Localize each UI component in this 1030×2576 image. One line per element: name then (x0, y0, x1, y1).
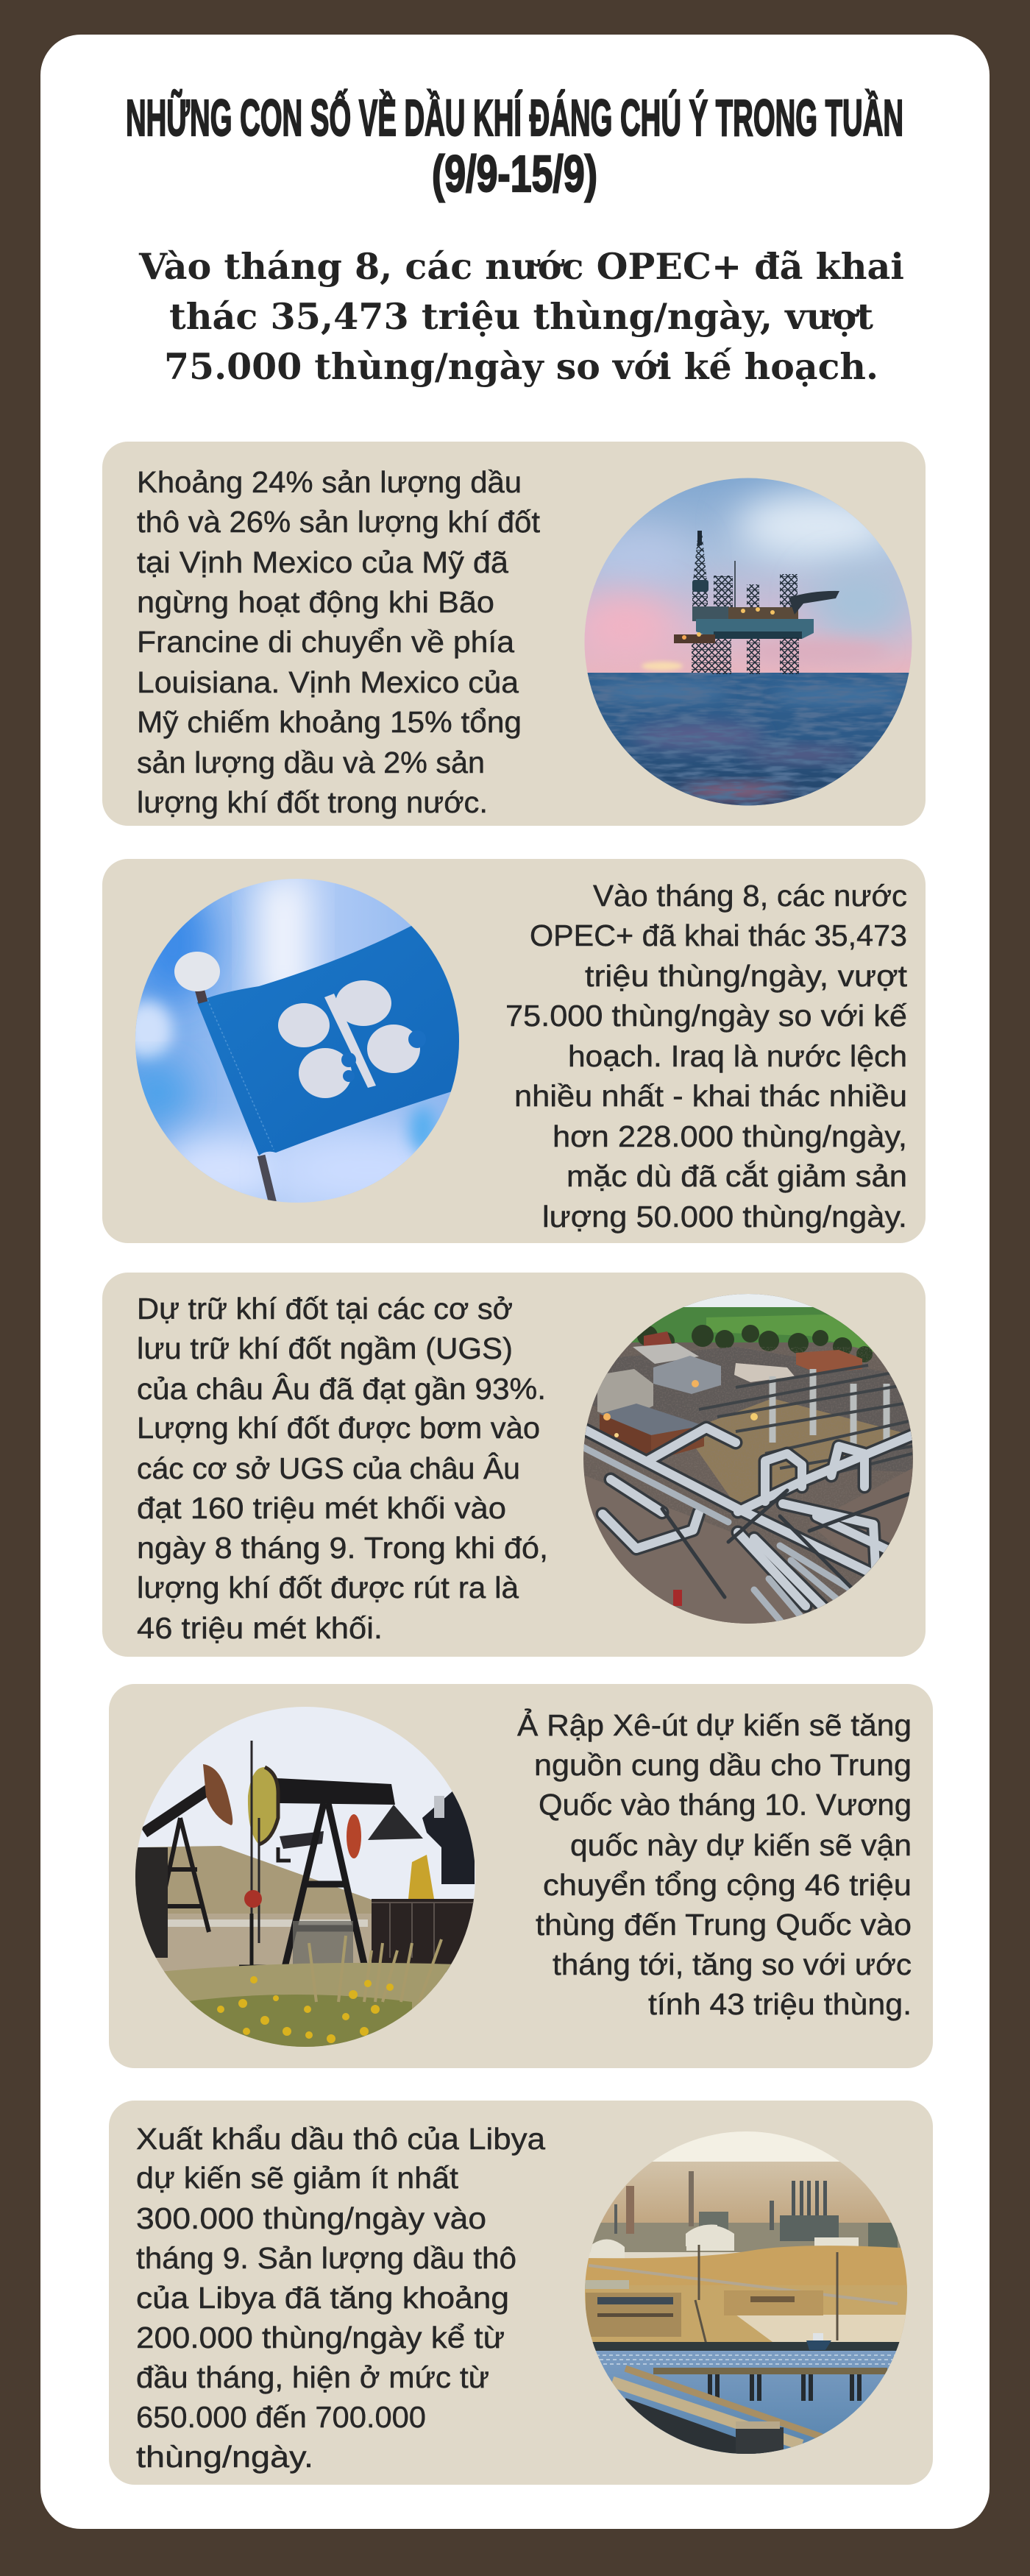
text block: OPEC+: nhiều nhất - khai thác nhiều (514, 1079, 907, 1113)
photo: offshore oil rig at sunset (574, 475, 916, 813)
desert dune and ground (581, 2246, 912, 2289)
flag cloth (197, 926, 459, 1156)
text block: UGS: ngày 8 tháng 9. Trong khi đó, (137, 1531, 548, 1565)
text block: Libya: 300.000 thùng/ngày vào (136, 2201, 486, 2235)
text block: Libya (136, 2122, 545, 2474)
text block: OPEC+: triệu thùng/ngày, vượt (585, 959, 908, 993)
panel: OPEC+ production (102, 859, 926, 1243)
photo: oil pumpjacks with yellow flowers (132, 1704, 478, 2053)
text block: Libya: 650.000 đến 700.000 (136, 2400, 426, 2434)
refinery stacks (614, 2171, 898, 2248)
water (581, 2351, 912, 2458)
text block: OPEC+: OPEC+ đã khai thác 35,473 (530, 919, 907, 952)
text block: UGS: lượng khí đốt được rút ra là (137, 1571, 519, 1604)
text block: Saudi Arabia: Quốc vào tháng 10. Vương (539, 1788, 912, 1822)
panel: Gulf of Mexico output (102, 442, 926, 826)
text block: OPEC+: hơn 228.000 thùng/ngày, (553, 1119, 907, 1153)
small rear pumpjack (278, 1814, 361, 1861)
photo: gas storage plant with pipes (581, 1292, 916, 1638)
text block: Libya: dự kiến sẽ giảm ít nhất (136, 2161, 459, 2195)
pumpjack left (135, 1789, 209, 1958)
text block: Gulf of Mexico: ngừng hoạt động khi Bão (137, 585, 494, 619)
panel background (109, 2101, 933, 2485)
text block: Gulf of Mexico: Louisiana. Vịnh Mexico của (137, 665, 519, 699)
text block: Saudi Arabia: tháng tới, tăng so với ước (553, 1947, 912, 1981)
pipe racks (699, 1365, 912, 1479)
text block: Libya: của Libya đã tăng khoảng (136, 2281, 509, 2315)
text block: Saudi Arabia: tính 43 triệu thùng. (648, 1987, 912, 2021)
text block: Libya: Xuất khẩu dầu thô của Libya (136, 2122, 545, 2156)
subtitle: Vào tháng 8, các nước OPEC+ đã khai (138, 245, 904, 288)
text block: UGS: Dự trữ khí đốt tại các cơ sở (137, 1292, 513, 1326)
text block: Gulf of Mexico: thô và 26% sản lượng khí đốt (137, 505, 541, 539)
title: (9/9-15/9) (432, 145, 597, 202)
text block: Gulf of Mexico: lượng khí đốt trong nước. (137, 785, 488, 819)
text block: UGS: Lượng khí đốt được bơm vào (137, 1411, 540, 1445)
red marker (673, 1590, 682, 1606)
subtitle: 75.000 thùng/ngày so với kế hoạch. (164, 345, 878, 388)
text block: Saudi Arabia: quốc này dự kiến sẽ vận (570, 1828, 912, 1862)
text block: OPEC+: mặc dù đã cắt giảm sản (566, 1159, 907, 1193)
panel: European gas storage (102, 1273, 926, 1657)
text block: OPEC+: Vào tháng 8, các nước (593, 879, 907, 913)
valve tree (239, 1890, 266, 1967)
pumpjack right (372, 1785, 478, 1972)
pumpjack main (248, 1741, 423, 1980)
text block: OPEC+: hoạch. Iraq là nước lệch (568, 1039, 907, 1073)
text block: Libya: tháng 9. Sản lượng dầu thô (136, 2241, 516, 2275)
text block: Saudi Arabia: chuyển tổng cộng 46 triệu (543, 1868, 912, 1902)
text block: OPEC+: 75.000 thùng/ngày so với kế (505, 999, 907, 1033)
text block: UGS: đạt 160 triệu mét khối vào (137, 1491, 506, 1525)
text block: OPEC+ (505, 879, 908, 1234)
panel background (102, 1273, 926, 1657)
text block: Gulf of Mexico: Francine di chuyển về phía (137, 625, 514, 659)
subtitle (138, 245, 904, 388)
text block: UGS: của châu Âu đã đạt gần 93%. (137, 1372, 546, 1406)
rig (674, 531, 839, 674)
text block: Libya: 200.000 thùng/ngày kể từ (136, 2321, 505, 2354)
flagpole (261, 1156, 274, 1207)
OPEC logo (278, 980, 426, 1098)
text block: Gulf of Mexico: Khoảng 24% sản lượng dầu (137, 465, 522, 499)
text block: OPEC+: lượng 50.000 thùng/ngày. (542, 1200, 907, 1234)
text block: Saudi Arabia: nguồn cung dầu cho Trung (534, 1748, 912, 1782)
text block: Gulf of Mexico (137, 465, 541, 819)
text block: Saudi Arabia (517, 1708, 912, 2021)
panel: Libya crude exports (109, 2101, 933, 2485)
buildings (597, 1343, 862, 1461)
text block: UGS: lưu trữ khí đốt ngầm (UGS) (137, 1331, 513, 1365)
pipes (581, 1428, 912, 1638)
pier (612, 2368, 887, 2458)
horsehead left (203, 1764, 232, 1825)
title (126, 88, 903, 202)
text block: Gulf of Mexico: sản lượng dầu và 2% sản (137, 746, 485, 779)
gravel foreground (585, 1476, 809, 1630)
subtitle: thác 35,473 triệu thùng/ngày, vượt (169, 295, 873, 338)
text block: Libya: đầu tháng, hiện ở mức từ (136, 2360, 489, 2394)
text block: UGS: 46 triệu mét khối. (137, 1611, 383, 1645)
panel background (102, 442, 926, 826)
flowering grass (164, 1936, 451, 2047)
text block: UGS (137, 1292, 548, 1645)
photo: Libyan refinery and oil port (581, 2127, 912, 2458)
text block: Saudi Arabia: Ả Rập Xê-út dự kiến sẽ tăng (517, 1708, 912, 1742)
panel background (102, 859, 926, 1243)
quay and ship (589, 2333, 901, 2351)
text block: Gulf of Mexico: tại Vịnh Mexico của Mỹ đã (137, 545, 508, 579)
storage domes (589, 2224, 859, 2258)
photo: OPEC flag (135, 879, 459, 1203)
text block: Libya: thùng/ngày. (136, 2440, 313, 2474)
panel: Saudi supply to China (109, 1684, 933, 2068)
pin (199, 986, 203, 1002)
panel background (109, 1684, 933, 2068)
process columns (772, 1369, 887, 1450)
text block: Saudi Arabia: thùng đến Trung Quốc vào (536, 1908, 912, 1942)
port buildings (585, 2245, 837, 2344)
text block: UGS: các cơ sở UGS của châu Âu (137, 1451, 520, 1485)
text block: Gulf of Mexico: Mỹ chiếm khoảng 15% tổng (137, 705, 522, 739)
